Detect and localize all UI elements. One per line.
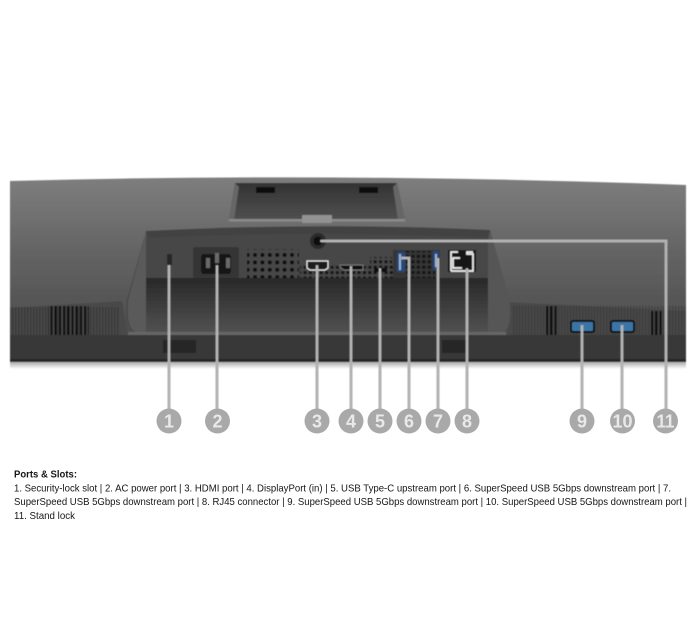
caption line 3: 11. Stand lock	[14, 510, 76, 522]
badge 2	[205, 408, 230, 434]
badge 9	[570, 408, 594, 434]
monitor rear photo	[10, 177, 686, 369]
badge 6	[396, 408, 422, 434]
badge 1: 1	[164, 412, 174, 432]
stand recess	[229, 183, 405, 223]
badge 4: 4	[346, 412, 356, 432]
port: HDMI	[307, 261, 328, 270]
badge 5	[368, 408, 392, 434]
badge 5: 5	[375, 412, 385, 432]
port: security-lock slot	[167, 254, 172, 265]
monitor body	[10, 177, 686, 362]
badge 3: 3	[312, 412, 322, 432]
badge 6: 6	[404, 412, 414, 432]
badge 10: 10	[612, 412, 632, 432]
port: USB 9	[570, 320, 595, 333]
badge 3	[304, 408, 330, 434]
stand lock hole	[310, 233, 326, 249]
callout badges	[156, 408, 678, 434]
badge 8: 8	[462, 412, 472, 432]
ports and slots caption	[14, 468, 687, 522]
central port panel	[127, 226, 510, 335]
ports: USB 6 and 7	[393, 250, 440, 278]
badge 8	[454, 408, 480, 434]
badge 7: 7	[433, 412, 443, 432]
shadow under monitor	[10, 362, 686, 369]
port: USB 10	[610, 320, 635, 333]
port: RJ45	[448, 250, 476, 272]
badge 2: 2	[212, 412, 223, 432]
badge 11: 11	[656, 412, 674, 432]
badge 4	[338, 408, 364, 434]
badge 9: 9	[577, 412, 587, 432]
port: AC power	[193, 247, 239, 278]
vent dots	[247, 249, 299, 278]
cable clips	[163, 340, 466, 353]
badge 10	[610, 408, 635, 434]
callout leader lines	[169, 241, 666, 410]
port: DisplayPort	[340, 265, 363, 270]
right vents	[506, 302, 686, 335]
badge 11	[653, 408, 678, 434]
badge 7	[426, 408, 450, 434]
caption heading: Ports & Slots:	[14, 468, 77, 480]
left vents	[10, 301, 128, 335]
port: USB Type-C upstream	[370, 257, 392, 272]
vent dots near ports	[300, 266, 400, 278]
lower bar	[10, 335, 686, 362]
badge 1	[156, 408, 182, 434]
